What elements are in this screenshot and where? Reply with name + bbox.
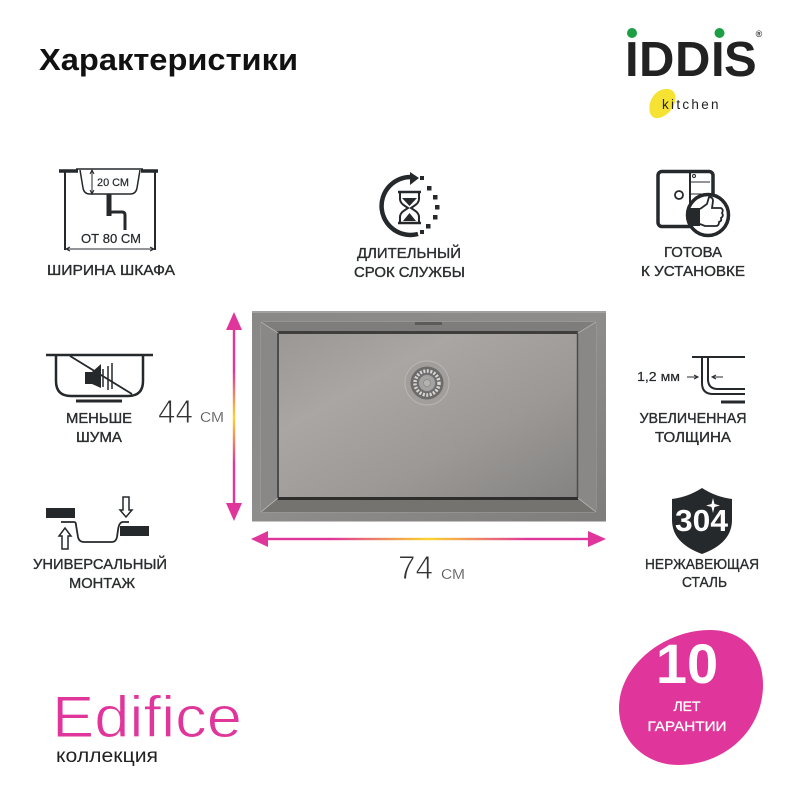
label: stainless steel: СТАЛЬ	[682, 575, 727, 591]
label: universal mounting: УНИВЕРСАЛЬНЫЙ	[33, 555, 167, 573]
dimension: 74 cm: СМ	[441, 566, 465, 583]
warranty badge: ГАРАНТИИ	[648, 718, 726, 734]
logo: IDDIS kitchen	[625, 28, 763, 118]
dimension: 74 cm	[398, 549, 465, 586]
label: long service life	[354, 244, 465, 281]
warranty badge: ЛЕТ	[673, 698, 701, 714]
label: increased thickness: УВЕЛИЧЕННАЯ	[640, 411, 746, 427]
icon text: 1,2 mm: 1,2 мм	[637, 369, 680, 384]
label: stainless steel: НЕРЖАВЕЮЩАЯ	[645, 557, 759, 573]
logo: IDDIS kitchen: kitchen	[662, 97, 720, 112]
icon: increased thickness	[687, 357, 745, 402]
icon: long service life	[382, 172, 440, 235]
icon: cabinet width	[59, 169, 158, 251]
label: long service life: СРОК СЛУЖБЫ	[354, 265, 465, 281]
label: less noise: ШУМА	[76, 430, 122, 446]
dimension: 44 cm	[158, 393, 224, 430]
label: ready to install: К УСТАНОВКЕ	[641, 264, 745, 280]
sink drain	[405, 361, 449, 405]
icon text: 20 см: 20 СМ	[97, 177, 129, 189]
icon: stainless steel 304 shield	[672, 488, 732, 554]
label: ready to install: ГОТОВА	[664, 245, 722, 261]
sink illustration	[252, 311, 606, 522]
collection caption: коллекция	[56, 746, 158, 767]
label: ready to install	[641, 245, 745, 280]
icon text: от 80 см: ОТ 80 СМ	[81, 232, 141, 246]
dimension: 74 cm: 74	[398, 549, 433, 586]
warranty badge: 10	[656, 632, 718, 695]
logo: IDDIS kitchen: IDDIS	[625, 33, 757, 87]
icon: universal mounting	[46, 497, 149, 549]
collection name: Edifice: Edifice	[52, 685, 242, 750]
title: Характеристики	[39, 42, 298, 77]
icon: ready to install	[658, 172, 728, 236]
label: long service life: ДЛИТЕЛЬНЫЙ	[357, 244, 461, 262]
icon: stainless steel 304 shield: 304	[675, 503, 729, 538]
label: increased thickness	[640, 411, 746, 446]
arrow: height dimension	[226, 312, 242, 521]
icon: less noise	[46, 355, 153, 401]
label: less noise: МЕНЬШЕ	[66, 411, 132, 427]
warranty badge	[619, 630, 763, 765]
dimension: 44 cm: СМ	[200, 409, 224, 426]
label: stainless steel	[645, 557, 759, 591]
label: less noise	[66, 411, 132, 446]
dimension: 44 cm: 44	[158, 393, 193, 430]
logo: IDDIS kitchen: ®	[756, 29, 763, 39]
label: increased thickness: ТОЛЩИНА	[655, 430, 731, 446]
arrow: width dimension	[251, 531, 606, 547]
label: universal mounting	[33, 555, 167, 592]
label: cabinet width: ШИРИНА ШКАФА	[47, 263, 175, 279]
label: universal mounting: МОНТАЖ	[69, 576, 136, 592]
